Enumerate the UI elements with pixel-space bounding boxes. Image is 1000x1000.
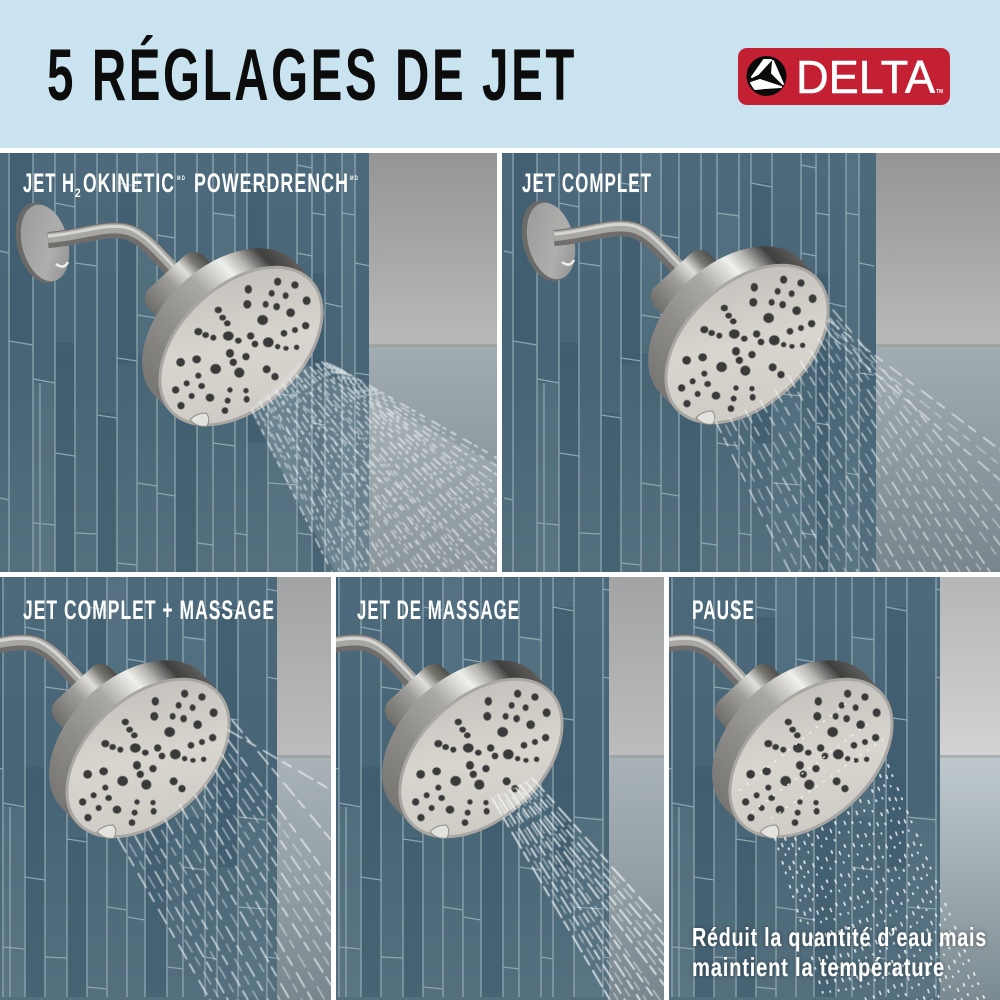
logo: Delta: TM (936, 89, 943, 95)
tile wall (502, 153, 876, 572)
label: MD (177, 176, 186, 182)
panel: jet H2Okinetic PowerDrench (0, 153, 497, 573)
label: OKINETIC (83, 168, 175, 198)
tile grout (669, 577, 940, 997)
label: 2 (75, 186, 82, 200)
water spray (492, 778, 664, 1000)
label: JET COMPLET (522, 168, 652, 198)
label (23, 173, 358, 197)
panel: jet de massage (336, 577, 664, 1000)
water spray (118, 720, 331, 1000)
water droplets (775, 765, 985, 1000)
water spray (250, 362, 497, 572)
water spray (715, 310, 1000, 572)
tile wall (669, 577, 940, 1000)
label: JET H (23, 168, 75, 198)
shower head (0, 634, 231, 839)
logo: Delta (738, 48, 950, 105)
tile wall (0, 577, 277, 1000)
tile wall (336, 577, 609, 1000)
label: JET COMPLET + MASSAGE (23, 595, 275, 625)
back wall (609, 577, 664, 1000)
label: JET DE MASSAGE (357, 595, 520, 625)
tile grout (0, 153, 370, 573)
label: PAUSE (692, 595, 755, 625)
back wall (940, 577, 1000, 1000)
tile wall (0, 153, 369, 572)
shower head (522, 200, 830, 425)
back wall (876, 153, 1000, 572)
panel: jet complet (502, 153, 1000, 573)
logo: Delta: DELTA (796, 51, 935, 103)
shower head (669, 634, 894, 839)
tile grout (0, 577, 277, 997)
panel: pause (669, 577, 1000, 1000)
shower head (336, 634, 564, 839)
label: POWERDRENCH (194, 168, 349, 198)
tile grout (504, 153, 874, 573)
back wall (277, 577, 331, 1000)
label: MD (350, 176, 359, 182)
panel: jet complet + massage (0, 577, 340, 1000)
tile grout (336, 577, 609, 997)
back wall (369, 153, 497, 572)
droplets on face (740, 700, 885, 818)
title: 5 RÉGLAGES DE JET (47, 35, 577, 116)
description (692, 922, 987, 982)
shower head (16, 202, 324, 427)
header band (0, 0, 1000, 148)
